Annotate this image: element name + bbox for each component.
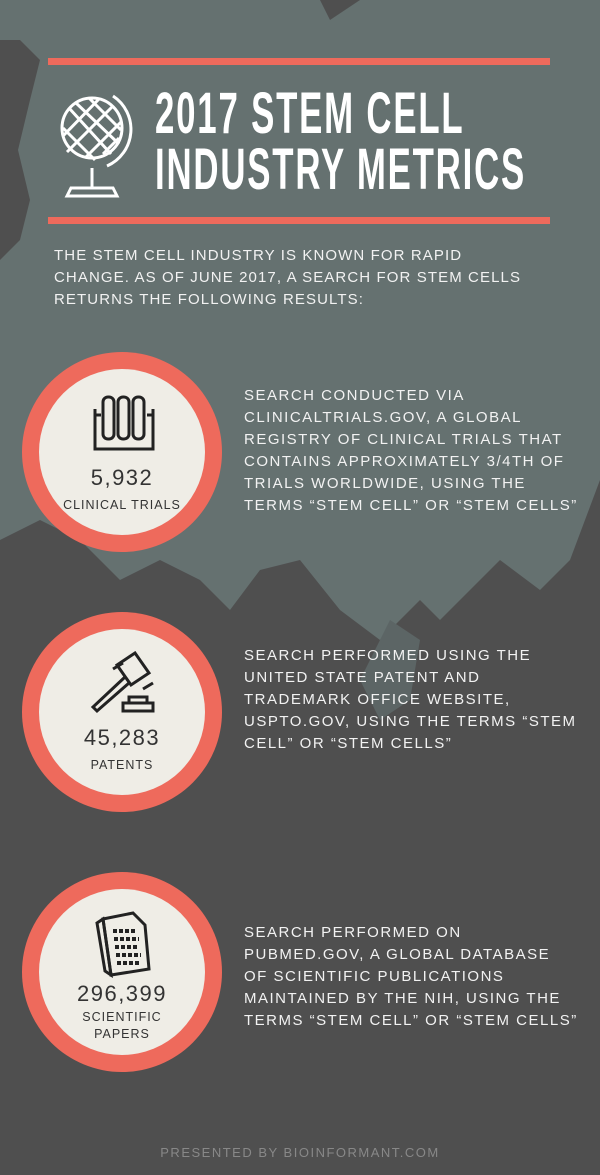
icon: globe [60, 94, 132, 198]
panel: papers circle: PAPERS [94, 1027, 150, 1041]
panel: clinical trials circle: CLINICAL TRIALS [63, 498, 181, 512]
top bar [48, 58, 550, 65]
title: 2017 STEM CELL [155, 81, 464, 146]
text: patents: SEARCH PERFORMED USING THE [244, 647, 531, 664]
icon: papers [95, 911, 151, 978]
panel: papers circle [22, 872, 222, 1072]
text: patents: USPTO.GOV, USING THE TERMS “STEM [244, 713, 576, 730]
text: clinical trials: CLINICALTRIALS.GOV, A GLOBAL [244, 409, 522, 426]
title [155, 81, 526, 202]
text: clinical trials: SEARCH CONDUCTED VIA [244, 387, 465, 404]
text: clinical trials [244, 387, 578, 514]
panel: patents circle: PATENTS [91, 758, 153, 772]
intro text: RETURNS THE FOLLOWING RESULTS: [54, 291, 364, 308]
text: clinical trials: TRIALS WORLDWIDE, USING THE [244, 475, 526, 492]
title: INDUSTRY METRICS [155, 137, 526, 202]
text: clinical trials: TERMS “STEM CELL” OR “STEM CELLS” [244, 497, 578, 514]
panel: patents circle [22, 612, 222, 812]
text: clinical trials: REGISTRY OF CLINICAL TRIALS THAT [244, 431, 563, 448]
text: papers: MAINTAINED BY THE NIH, USING THE [244, 990, 561, 1007]
panel: papers circle: 296,399 [77, 981, 167, 1006]
text: papers: PUBMED.GOV, A GLOBAL DATABASE [244, 946, 550, 963]
panel: clinical trials circle: 5,932 [91, 465, 153, 490]
intro text: CHANGE. AS OF JUNE 2017, A SEARCH FOR STEM CELLS [54, 269, 521, 286]
text: papers: OF SCIENTIFIC PUBLICATIONS [244, 968, 504, 985]
text: papers: TERMS “STEM CELL” OR “STEM CELLS” [244, 1012, 578, 1029]
text: papers [244, 924, 578, 1029]
footer: PRESENTED BY BIOINFORMANT.COM [160, 1145, 440, 1160]
text: patents [244, 647, 576, 752]
text: papers: SEARCH PERFORMED ON [244, 924, 462, 941]
bottom bar [48, 217, 550, 224]
text: patents: CELL” OR “STEM CELLS” [244, 735, 452, 752]
text: clinical trials: CONTAINS APPROXIMATELY 3/4TH OF [244, 453, 564, 470]
intro text: THE STEM CELL INDUSTRY IS KNOWN FOR RAPID [54, 247, 462, 264]
icon: test tubes [94, 396, 154, 450]
panel: clinical trials circle [22, 352, 222, 552]
icon: gavel [90, 651, 154, 713]
text: patents: TRADEMARK OFFICE WEBSITE, [244, 691, 511, 708]
text: patents: UNITED STATE PATENT AND [244, 669, 480, 686]
panel: papers circle: SCIENTIFIC [82, 1010, 162, 1024]
intro text [54, 247, 521, 308]
panel: patents circle: 45,283 [84, 725, 160, 750]
